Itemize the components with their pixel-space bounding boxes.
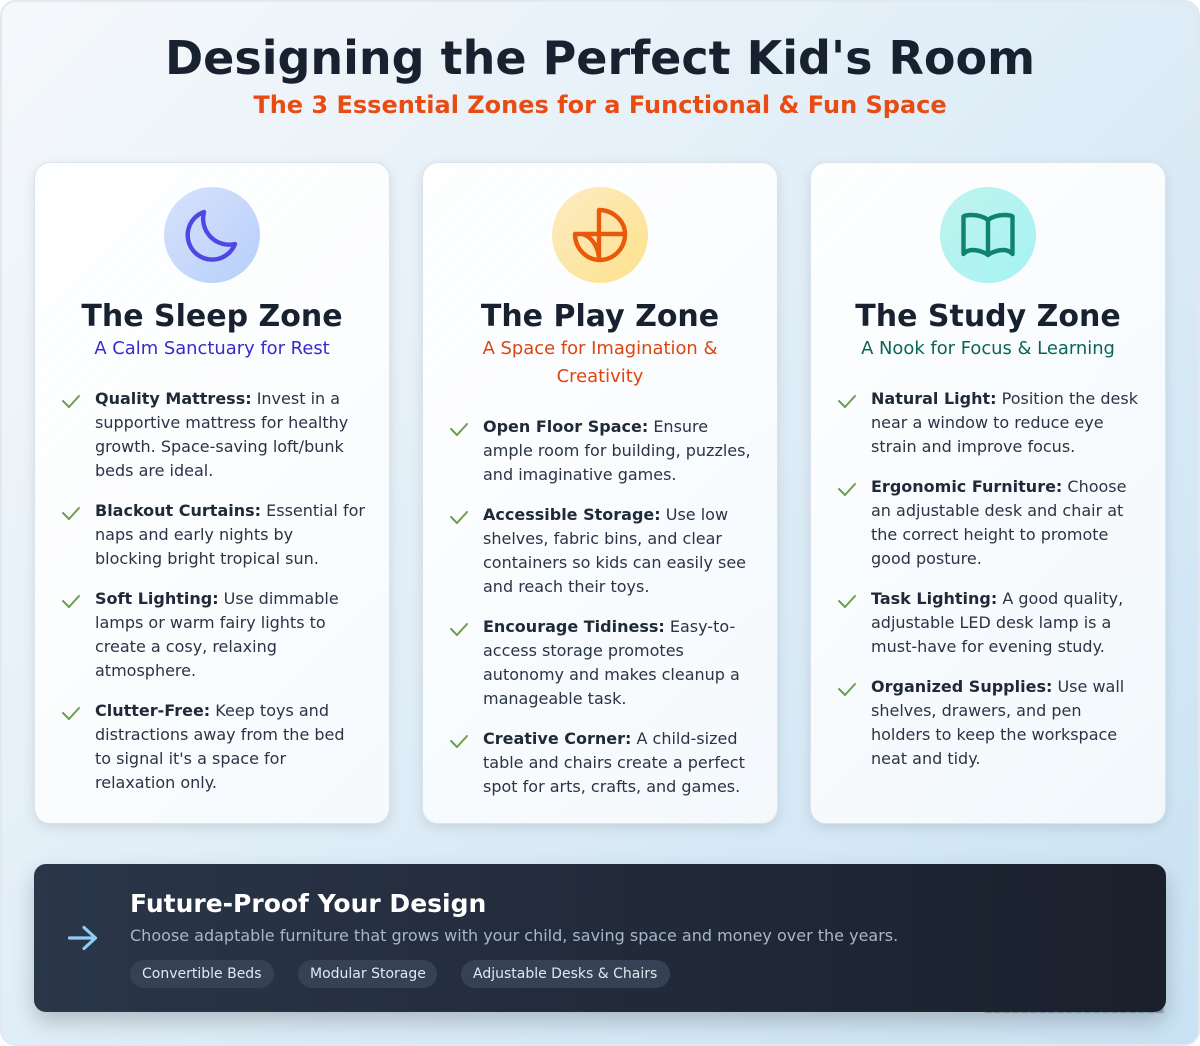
list: play tips: Creative Corner: A child-sized [483, 729, 737, 748]
banner heading: Future-Proof Your Design [130, 889, 486, 918]
list: study tips: neat and tidy. [871, 749, 980, 768]
list: play tips: access storage promotes [483, 641, 684, 660]
icon: moon [164, 187, 260, 283]
list: play tips: and imaginative games. [483, 465, 676, 484]
list: play tips: Accessible Storage: Use low [483, 505, 728, 524]
list: study tips: Natural Light: Position the desk [871, 389, 1138, 408]
list: sleep tips: Clutter-Free: Keep toys and [95, 701, 329, 720]
tagline: A Space for Imagination & [483, 338, 717, 359]
list: play tips [450, 417, 751, 796]
banner: future-proof [34, 864, 1166, 1012]
list: sleep tips: create a cosy, relaxing [95, 637, 277, 656]
list: study tips: Organized Supplies: Use wall [871, 677, 1124, 696]
list: sleep tips: beds are ideal. [95, 461, 213, 480]
list: play tips: manageable task. [483, 689, 626, 708]
list: sleep tips: Quality Mattress: Invest in a [95, 389, 340, 408]
list: sleep tips: relaxation only. [95, 773, 217, 792]
panel: sleep zone [34, 162, 390, 824]
list: sleep tips: Soft Lighting: Use dimmable [95, 589, 339, 608]
heading: the play zone: The Play Zone [481, 299, 719, 334]
list: study tips: good posture. [871, 549, 982, 568]
list: study tips: must-have for evening study. [871, 637, 1105, 656]
title: Designing the Perfect Kid's Room [165, 31, 1035, 85]
list: study tips: the correct height to promote [871, 525, 1108, 544]
list: sleep tips: distractions away from the bed [95, 725, 345, 744]
list: sleep tips [62, 389, 365, 792]
list: study tips: strain and improve focus. [871, 437, 1075, 456]
subtitle: The 3 Essential Zones for a Functional & Fun Space [253, 91, 947, 119]
chip: adjustable desks [461, 960, 670, 988]
chip: adjustable desks: Adjustable Desks & Chairs [473, 966, 657, 982]
list: study tips [838, 389, 1138, 768]
list: study tips: Task Lighting: A good quality, [871, 589, 1123, 608]
list: study tips: holders to keep the workspace [871, 725, 1117, 744]
list: sleep tips: to signal it's a space for [95, 749, 286, 768]
list: play tips: and reach their toys. [483, 577, 649, 596]
list: study tips: shelves, drawers, and pen [871, 701, 1081, 720]
list: sleep tips: naps and early nights by [95, 525, 293, 544]
icon: arrow [68, 926, 98, 950]
chip: convertible beds: Convertible Beds [142, 966, 262, 982]
list: study tips: Ergonomic Furniture: Choose [871, 477, 1126, 496]
tagline [482, 338, 717, 387]
list: study tips: an adjustable desk and chair at [871, 501, 1123, 520]
banner text: Choose adaptable furniture that grows with your child, saving space and money over the years. [130, 926, 898, 945]
heading: the sleep zone: The Sleep Zone [81, 299, 343, 334]
icon: open book [940, 187, 1036, 283]
list: sleep tips: atmosphere. [95, 661, 196, 680]
tagline: A Calm Sanctuary for Rest [94, 338, 330, 359]
list: sleep tips: lamps or warm fairy lights to [95, 613, 326, 632]
list: play tips: Open Floor Space: Ensure [483, 417, 708, 436]
chip: modular storage: Modular Storage [310, 966, 426, 982]
list: sleep tips: Blackout Curtains: Essential for [95, 501, 365, 520]
panel: study zone [810, 162, 1166, 824]
list: play tips: containers so kids can easily see [483, 553, 746, 572]
list: play tips: spot for arts, crafts, and games. [483, 777, 740, 796]
list: play tips: ample room for building, puzzles, [483, 441, 751, 460]
heading: the study zone: The Study Zone [855, 299, 1121, 334]
list: play tips: Encourage Tidiness: Easy-to- [483, 617, 735, 636]
list: play tips: table and chairs create a perfect [483, 753, 745, 772]
list: play tips: autonomy and makes cleanup a [483, 665, 740, 684]
tagline: Creativity [557, 366, 643, 387]
list: play tips: shelves, fabric bins, and clear [483, 529, 722, 548]
chip: modular storage [298, 960, 437, 988]
list: sleep tips: blocking bright tropical sun. [95, 549, 319, 568]
list: study tips: near a window to reduce eye [871, 413, 1104, 432]
list: study tips: adjustable LED desk lamp is a [871, 613, 1111, 632]
icon: play shape [552, 187, 648, 283]
list: sleep tips: growth. Space-saving loft/bunk [95, 437, 344, 456]
list: sleep tips: supportive mattress for healthy [95, 413, 348, 432]
chip: convertible beds [130, 960, 274, 988]
header [165, 31, 1035, 119]
panel: play zone [422, 162, 778, 824]
tagline: A Nook for Focus & Learning [861, 338, 1115, 359]
